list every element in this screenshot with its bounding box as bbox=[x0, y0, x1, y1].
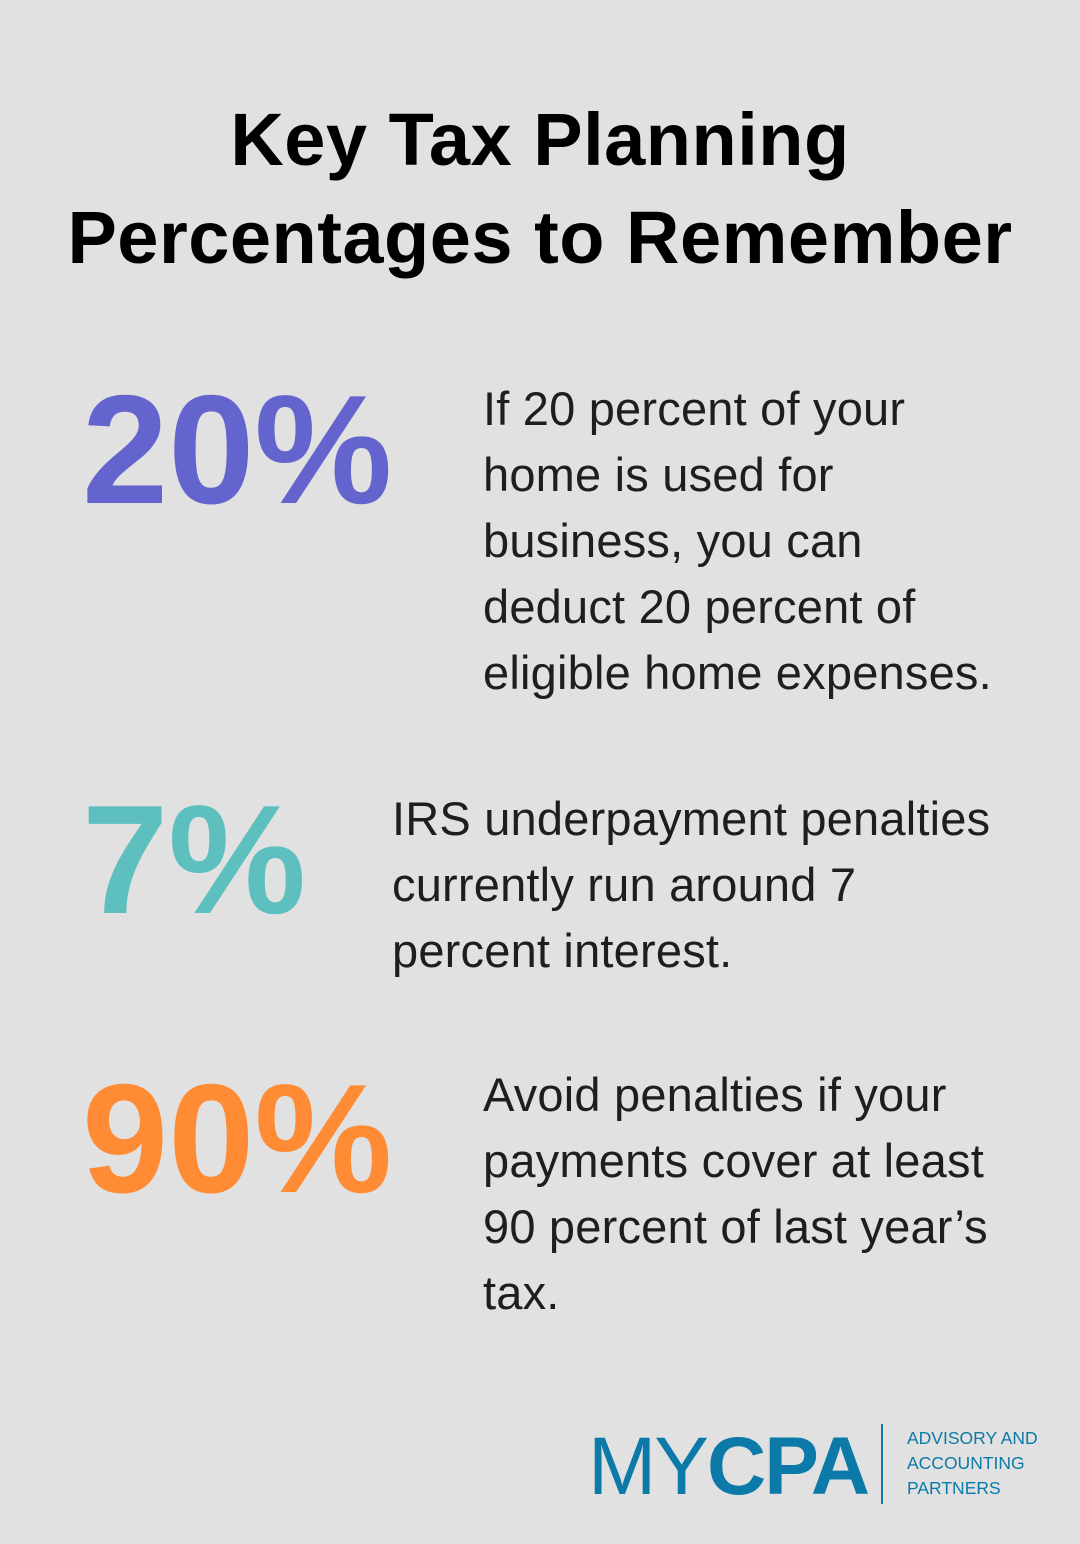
number 7%: 7% bbox=[82, 773, 306, 946]
number 90%: 90% bbox=[82, 1052, 392, 1225]
number 20%: 20% bbox=[82, 363, 392, 536]
title: Percentages to Remember bbox=[67, 196, 1013, 279]
text 7%: currently run around 7 bbox=[392, 858, 856, 911]
text 20%: business, you can bbox=[483, 514, 863, 567]
logo wordmark: MYCPA bbox=[588, 1421, 868, 1512]
stat: 90% bbox=[82, 1052, 988, 1319]
text 20%: home is used for bbox=[483, 448, 834, 501]
logo tagline: PARTNERS bbox=[907, 1478, 1001, 1498]
text 90%: 90 percent of last year’s bbox=[483, 1200, 988, 1253]
logo tagline: ADVISORY AND bbox=[907, 1428, 1038, 1448]
text 90%: tax. bbox=[483, 1266, 560, 1319]
text 20%: eligible home expenses. bbox=[483, 646, 992, 699]
logo tagline bbox=[907, 1428, 1038, 1498]
text 7% bbox=[392, 792, 990, 977]
text 20%: deduct 20 percent of bbox=[483, 580, 916, 633]
text 20% bbox=[483, 382, 992, 699]
text 90%: Avoid penalties if your bbox=[483, 1068, 947, 1121]
title: Key Tax Planning bbox=[230, 98, 850, 181]
text 20%: If 20 percent of your bbox=[483, 382, 905, 435]
text 90%: payments cover at least bbox=[483, 1134, 984, 1187]
text 7%: IRS underpayment penalties bbox=[392, 792, 990, 845]
title bbox=[67, 98, 1013, 279]
text 90% bbox=[483, 1068, 988, 1319]
text 7%: percent interest. bbox=[392, 924, 732, 977]
stat: 7% bbox=[82, 773, 990, 977]
stat: 20% bbox=[82, 363, 992, 699]
logo bbox=[588, 1421, 1038, 1512]
logo tagline: ACCOUNTING bbox=[907, 1453, 1025, 1473]
